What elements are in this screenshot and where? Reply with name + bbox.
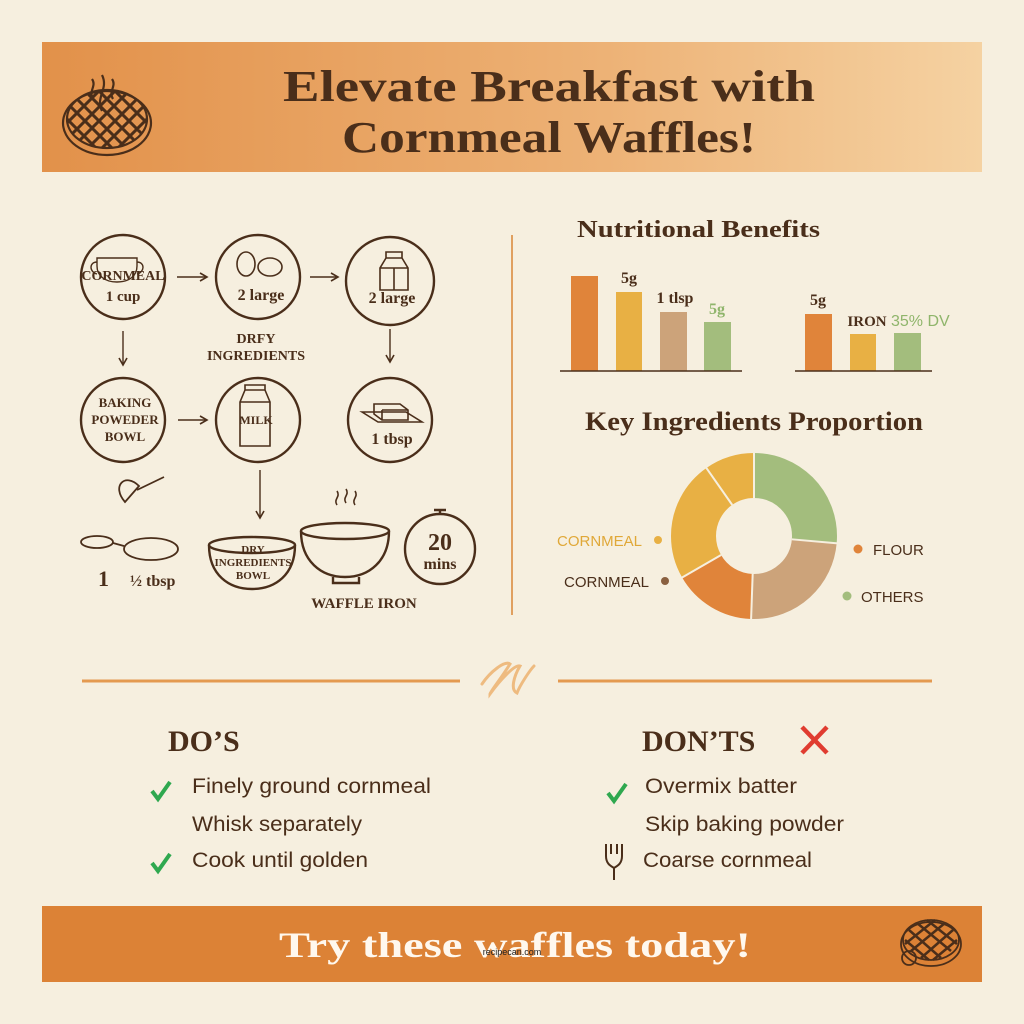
step: milk carton: 2 large — [369, 290, 415, 307]
bar chart: left: 5g — [621, 270, 637, 287]
step: baking powder: BAKING — [99, 395, 151, 410]
footer banner — [42, 906, 982, 982]
panel: do's: Whisk separately — [192, 813, 363, 836]
legend: donut — [557, 533, 924, 606]
icon: timer 20 mins — [405, 510, 475, 584]
icon: check — [152, 782, 170, 799]
icon: waffle iron bowl — [301, 489, 389, 583]
bar chart: left — [560, 270, 742, 371]
step: baking powder: BOWL — [105, 429, 146, 444]
icon: dry ingredients bowl: INGREDIENTS — [214, 557, 292, 569]
vertical divider — [511, 235, 513, 615]
label: measurements: 1 — [98, 566, 109, 591]
heading: key ingredients proportion: Key Ingredients Proportion — [585, 407, 924, 436]
heading: nutritional benefits: Nutritional Benefits — [577, 217, 820, 243]
donut chart — [681, 452, 838, 620]
legend: donut: OTHERS — [861, 589, 924, 606]
step: butter — [348, 378, 432, 462]
label: dry ingredients line 2: INGREDIENTS — [207, 349, 305, 364]
legend: donut: CORNMEAL — [564, 574, 649, 591]
icon: dry ingredients bowl — [209, 537, 295, 589]
label: waffle iron: WAFFLE IRON — [311, 596, 417, 612]
step: eggs: 2 large — [238, 287, 284, 304]
icon: dry ingredients bowl: DRY — [241, 544, 265, 556]
step: baking powder — [81, 378, 165, 462]
label: measurements — [98, 566, 175, 591]
panel: don'ts — [606, 725, 844, 880]
panel: don'ts: DON’TS — [642, 725, 755, 758]
icon: check 2 — [152, 854, 170, 871]
bar chart: left: 5g — [709, 301, 725, 318]
panel: do's: Cook until golden — [192, 849, 368, 872]
icon: whisk and spoons — [81, 477, 178, 560]
panel: don'ts: Overmix batter — [645, 775, 797, 798]
horizontal divider with squiggle — [82, 663, 932, 694]
footer banner: Try these waffles today! — [279, 925, 751, 965]
panel: recipe flow — [81, 235, 475, 612]
step: milk — [216, 378, 300, 462]
title: Elevate Breakfast with — [283, 62, 815, 111]
label: measurements: ½ tbsp — [130, 573, 175, 590]
panel: do's: Finely ground cornmeal — [192, 775, 431, 798]
panel: don'ts: Skip baking powder — [645, 813, 844, 836]
bar chart: left: 1 tlsp — [657, 290, 694, 307]
icon: timer 20 mins: mins — [424, 556, 456, 573]
icon: waffle header — [62, 74, 152, 156]
step: baking powder: POWEDER — [91, 412, 159, 427]
label: dry ingredients: DRFY — [237, 332, 275, 347]
legend: donut: CORNMEAL — [557, 533, 642, 550]
header banner — [42, 42, 982, 172]
bar chart: right: IRON — [847, 314, 887, 330]
arrows — [123, 277, 390, 518]
icon: dry ingredients bowl: BOWL — [236, 570, 270, 582]
bar chart: right: 35% DV — [891, 313, 950, 330]
bar chart: right — [795, 292, 950, 371]
step: eggs — [216, 235, 300, 319]
panel: do's — [152, 725, 431, 872]
panel: don'ts: Coarse cornmeal — [643, 849, 812, 872]
step: cornmeal: 1 cup — [106, 289, 140, 305]
bar chart: right: 5g — [810, 292, 826, 309]
icon: red x — [802, 727, 827, 753]
header banner: Cornmeal Waffles! — [342, 113, 756, 162]
legend: donut: FLOUR — [873, 542, 924, 559]
icon: timer 20 mins: 20 — [428, 530, 452, 556]
icon: waffle footer — [901, 920, 961, 966]
icon: check — [608, 784, 626, 801]
step: cornmeal: CORNMEAL — [81, 269, 165, 284]
step: cornmeal — [81, 235, 165, 319]
footer banner: recipecan.com — [483, 947, 541, 957]
step: milk carton — [346, 237, 434, 325]
step: milk: MILK — [239, 413, 273, 427]
icon: fork — [606, 844, 622, 880]
panel: do's: DO’S — [168, 725, 240, 758]
step: butter: 1 tbsp — [371, 431, 413, 448]
